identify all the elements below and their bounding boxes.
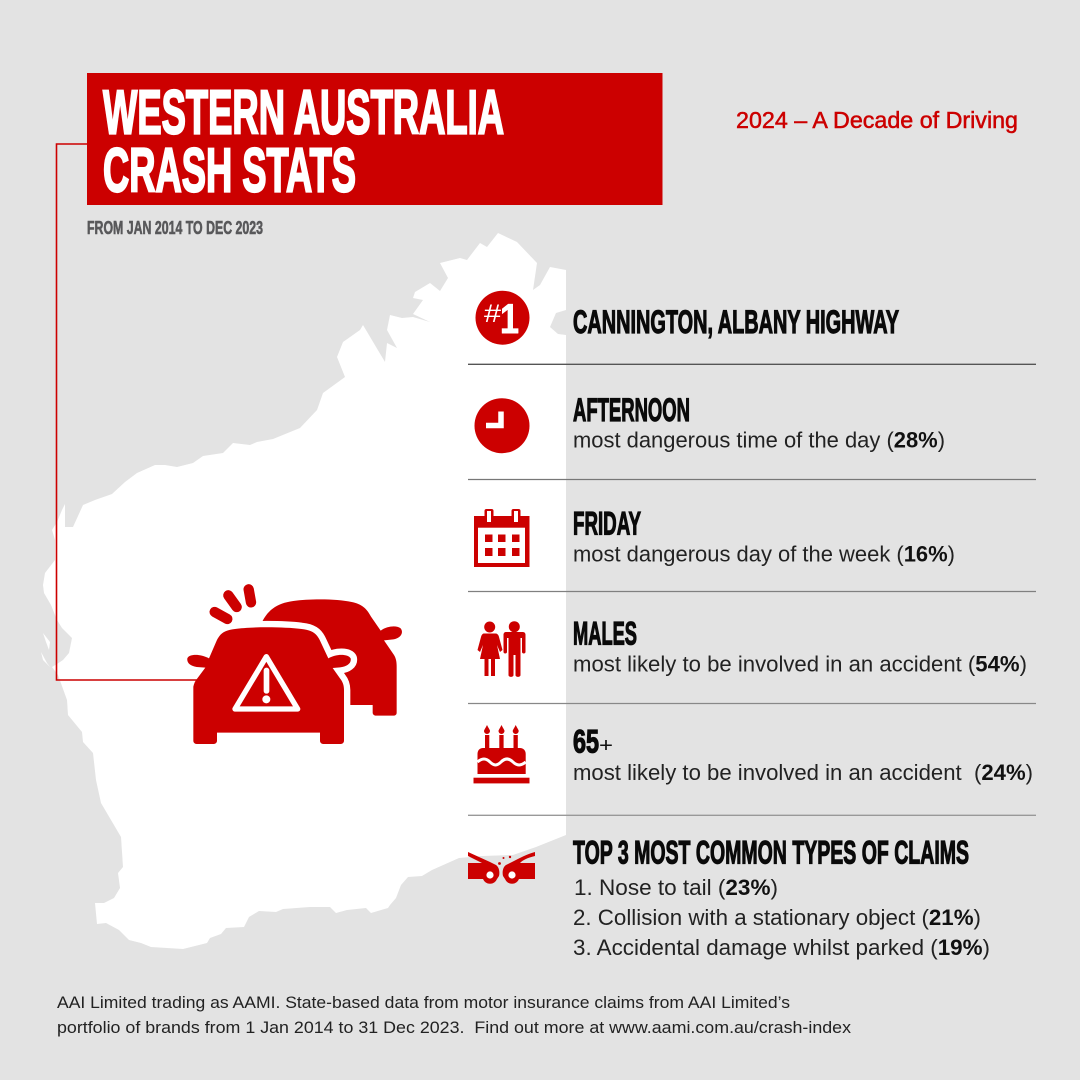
day heading: FRIDAY: [573, 506, 641, 542]
back car: [260, 599, 402, 716]
time detail: most dangerous time of the day (28%): [573, 428, 945, 453]
day detail: most dangerous day of the week (16%): [573, 542, 955, 567]
impact marks: [215, 589, 251, 619]
icon: calendar: [474, 509, 530, 567]
row: age: [474, 724, 1033, 785]
row: time of day: [474, 392, 945, 453]
footer line 2: portfolio of brands from 1 Jan 2014 to 31 Dec 2023. Find out more at www.aami.com.au/crash-index: [57, 1019, 852, 1037]
icon: number one badge: 1: [500, 295, 519, 342]
time heading: AFTERNOON: [573, 392, 690, 428]
icon: number one badge: #: [484, 300, 501, 328]
claim 3: 3. Accidental damage whilst parked ( 19%): [573, 935, 990, 960]
age detail: most likely to be involved in an accident (24%): [573, 760, 1033, 785]
front car: [187, 627, 351, 744]
warning triangle: [235, 657, 298, 709]
row: claim types: [468, 834, 990, 960]
age plus sign: +: [599, 735, 613, 757]
connector line from title to car icon: [56, 144, 197, 680]
row: top location: [476, 291, 899, 345]
title text line 1: WESTERN AUSTRALIA: [103, 78, 504, 148]
row: day of week: [474, 506, 955, 567]
date range subtitle: FROM JAN 2014 TO DEC 2023: [87, 217, 263, 238]
claim 2: 2. Collision with a stationary object (21%): [573, 905, 981, 930]
footer disclaimer: [57, 994, 852, 1037]
gender heading: MALES: [573, 616, 637, 652]
row dividers: [468, 364, 1036, 815]
row: gender: [478, 616, 1027, 677]
title text line 2: CRASH STATS: [103, 136, 356, 206]
footer line 1: AAI Limited trading as AAMI. State-based data from motor insurance claims from AAI Limited’s: [57, 994, 790, 1012]
map: Western Australia silhouette: [41, 233, 566, 949]
icon: head-on collision: [468, 852, 535, 884]
exclamation mark: [262, 668, 270, 703]
icon: clock: [474, 398, 530, 453]
icon: number one badge: [476, 291, 530, 345]
claim 1: 1. Nose to tail (23%): [574, 875, 778, 900]
icon: female and male figures: [478, 621, 526, 677]
gender detail: most likely to be involved in an accident (54%): [573, 652, 1027, 677]
header tagline: 2024 – A Decade of Driving: [736, 107, 1018, 133]
age heading: 65: [573, 724, 599, 760]
icon: two cars crash warning: [187, 589, 402, 744]
title banner: [87, 73, 662, 206]
icon: birthday cake: [474, 725, 530, 783]
